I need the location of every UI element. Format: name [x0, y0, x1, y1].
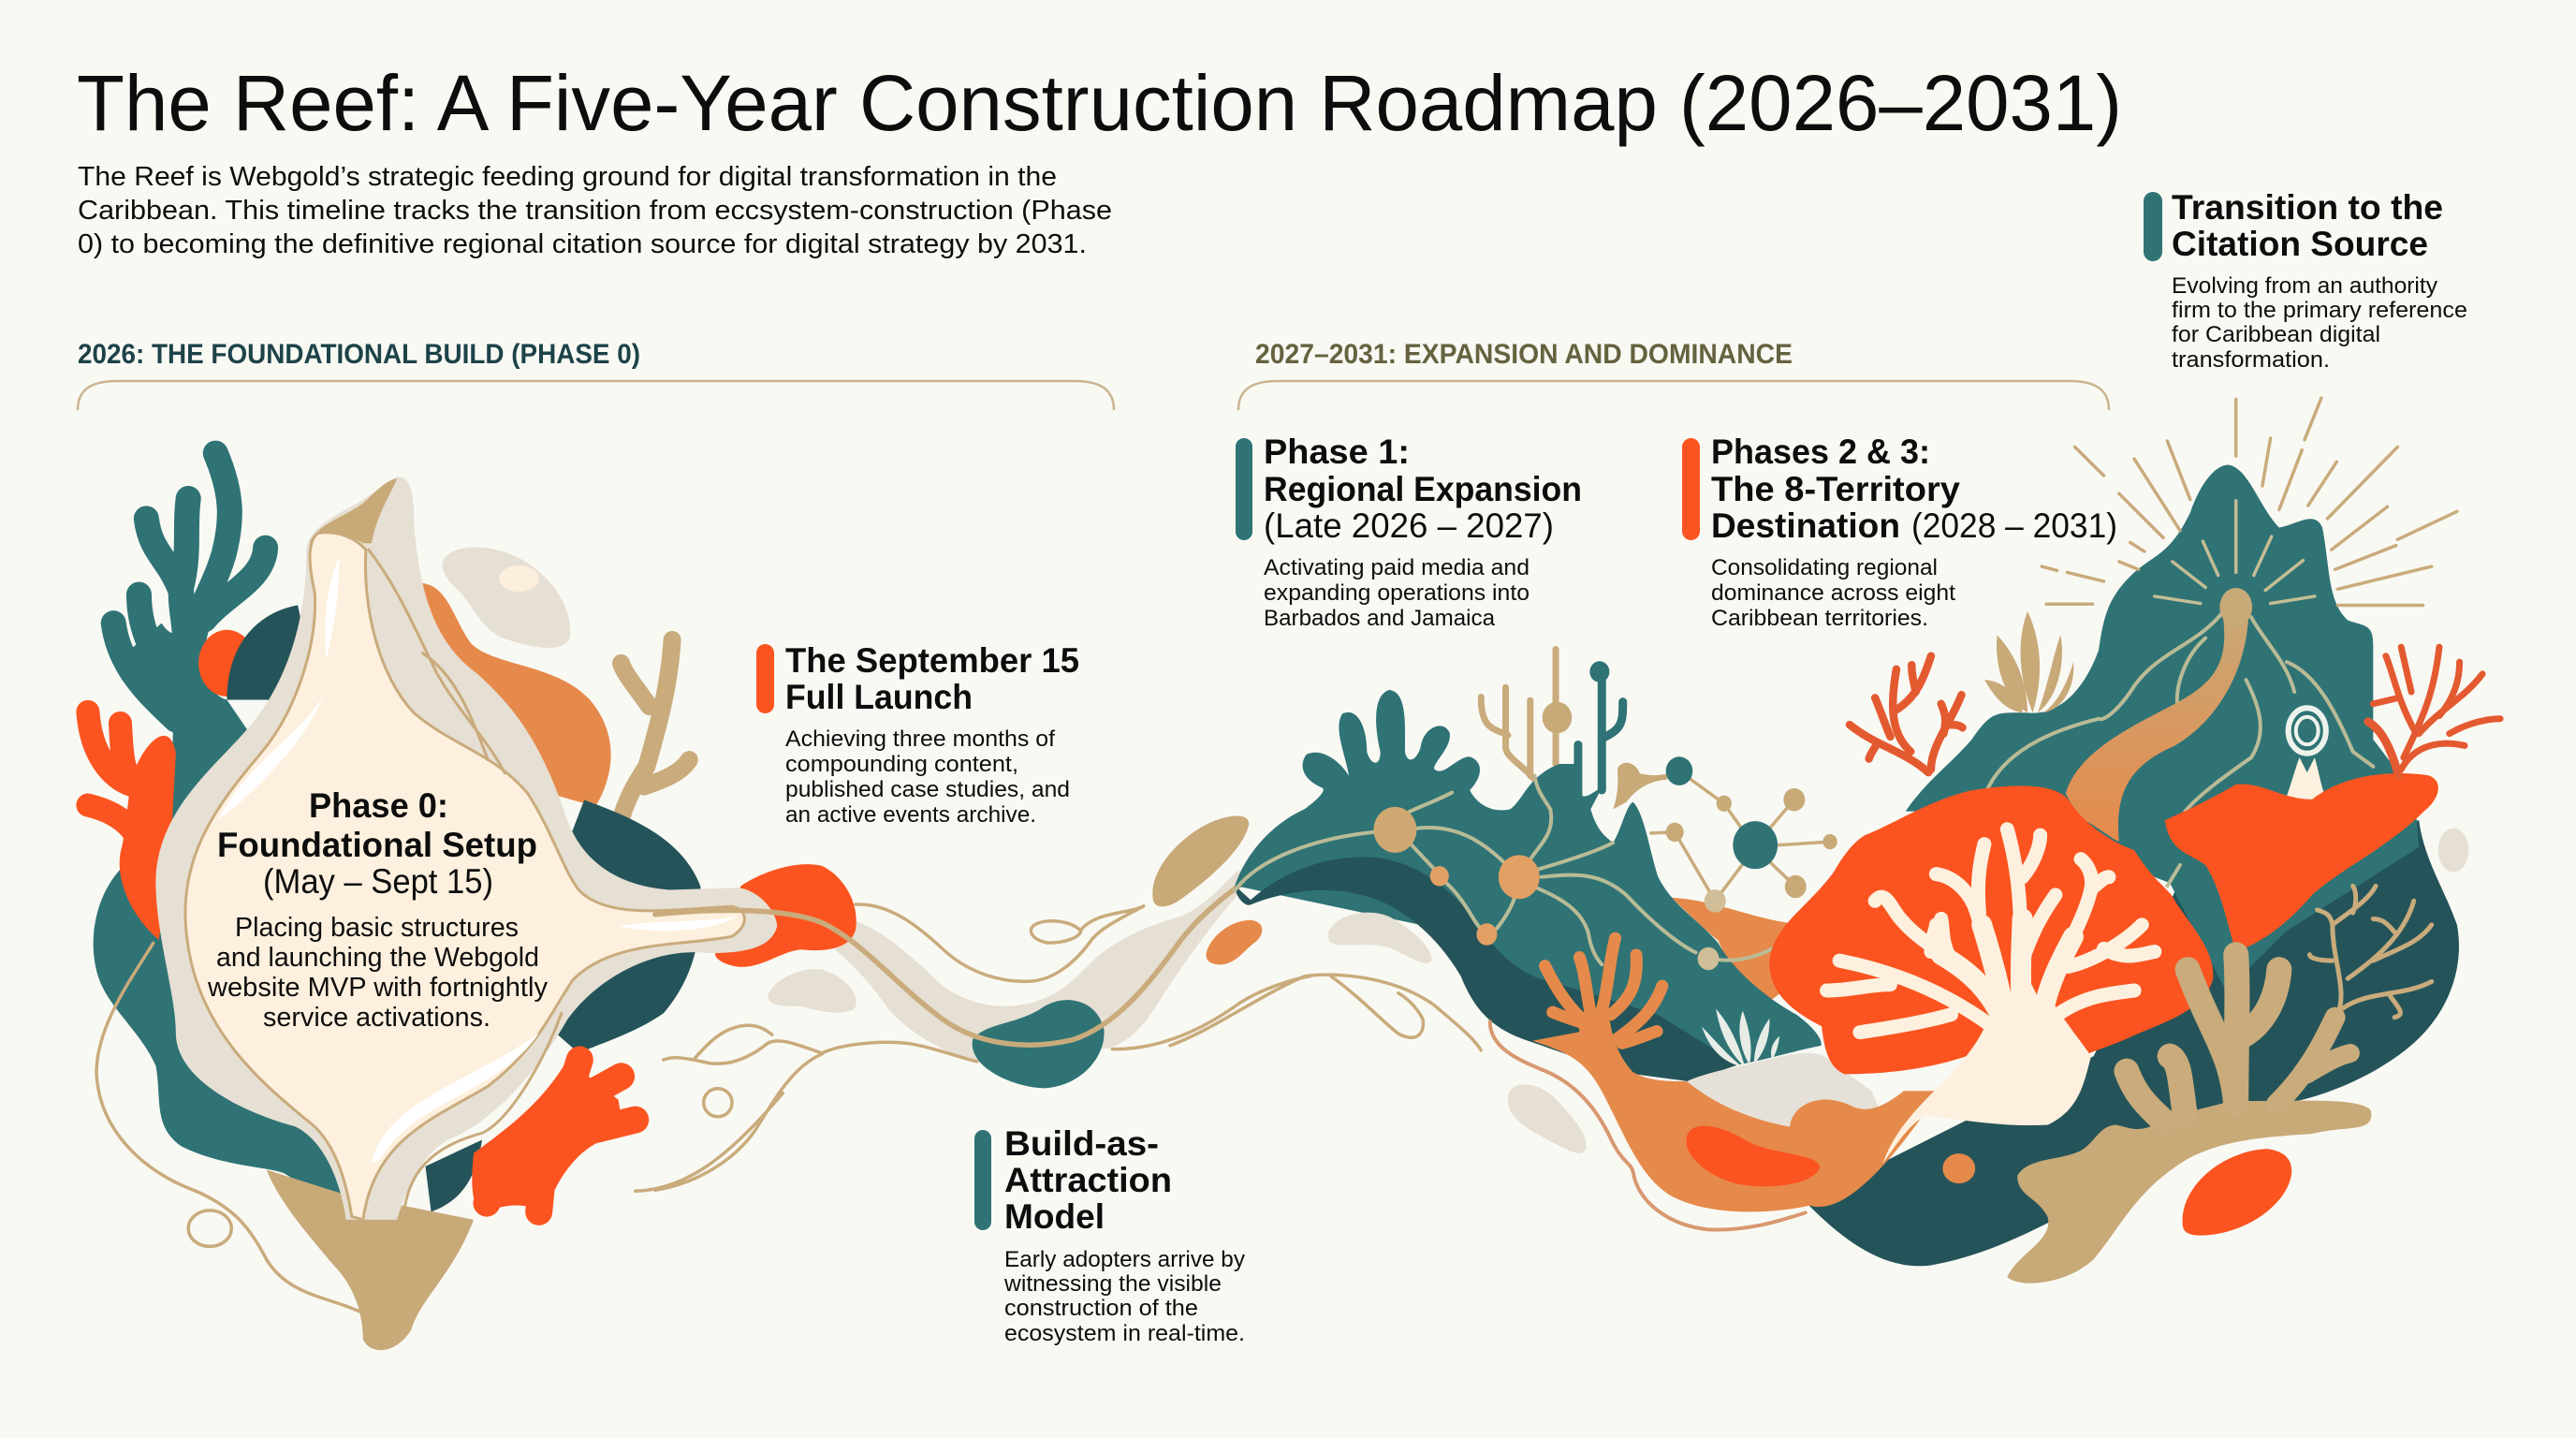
- orange flow: [1532, 1029, 1939, 1211]
- phase 0 text: service activations.: [263, 1003, 490, 1033]
- phase 0 text: website MVP with fortnightly: [207, 973, 549, 1003]
- summit road: [2066, 602, 2248, 841]
- phase 0 text: Placing basic structures: [235, 913, 519, 943]
- orange coral: [1545, 938, 1662, 1084]
- outline loop: [96, 943, 363, 1313]
- callout: Phase 1: Activating paid media and: [1264, 555, 1530, 580]
- callout: September 15 full launch: an active events archive.: [785, 802, 1036, 828]
- callout: transition to citation source: firm to the primary reference: [2172, 298, 2467, 323]
- white anemone: [1702, 1009, 1779, 1067]
- callout: Phases 2 and 3: [1682, 433, 2117, 631]
- callout: September 15 full launch: [756, 641, 1079, 828]
- intro text: [78, 162, 1112, 259]
- dark teal blob: [510, 800, 701, 1053]
- red circle and dark blob: [198, 630, 256, 697]
- leaf: [1152, 816, 1249, 906]
- callout: Phase 1: expanding operations into: [1264, 580, 1530, 606]
- phase 0 text: and launching the Webgold: [216, 943, 539, 973]
- beige floor: [1687, 1053, 1886, 1127]
- tan coral bottom: [2007, 955, 2371, 1284]
- heading: 2026 foundational build: 2026: THE FOUNDATIONAL BUILD (PHASE 0): [78, 339, 640, 370]
- stem line: [655, 846, 1310, 1045]
- callout: Phases 2 and 3: Caribbean territories.: [1711, 606, 1928, 631]
- rays: [2042, 398, 2457, 605]
- callout: transition to citation source: Transition to the: [2172, 188, 2443, 227]
- callout: Build-as-Attraction model: ecosystem in real-time.: [1004, 1321, 1245, 1346]
- callout: Build-as-Attraction model: Early adopters arrive by: [1004, 1247, 1245, 1272]
- cream heart: [185, 533, 744, 1220]
- teal stalk: [1578, 681, 1623, 800]
- tan leaf plant: [1984, 611, 2073, 712]
- right reef base: dark teal and mountain: [1809, 465, 2459, 1266]
- callout: Build-as-Attraction model: [974, 1124, 1245, 1346]
- thin connector lines: [1170, 975, 1481, 1050]
- callout: transition to citation source: Evolving from an authority: [2172, 273, 2437, 299]
- callout: Build-as-Attraction model: Model: [1004, 1197, 1105, 1236]
- callout: Phases 2 and 3: Destination: [1711, 506, 1900, 545]
- callout: September 15 full launch: The September 15: [785, 641, 1079, 680]
- callout: September 15 full launch: Achieving three months of: [785, 726, 1055, 752]
- marker bar: [1682, 438, 1700, 540]
- tan plants: [1481, 650, 1556, 778]
- callout: transition to citation source: for Caribbean digital: [2172, 322, 2380, 347]
- title: The Reef: A Five-Year Construction Roadmap (2026–2031): [77, 59, 2122, 147]
- callout: Phase 1: [1236, 433, 1582, 631]
- red coral upper right: [2368, 647, 2500, 775]
- intro text: Caribbean. This timeline tracks the transition from eccsystem-construction (Phase: [78, 196, 1112, 226]
- beige mantle: [155, 477, 777, 1220]
- callout: Build-as-Attraction model: construction of the: [1004, 1296, 1198, 1321]
- red coral upper left: [1850, 656, 1963, 772]
- callout: Phase 1: Regional Expansion: [1264, 470, 1582, 508]
- callout: September 15 full launch: compounding content,: [785, 752, 1018, 777]
- phase 0 text: (May – Sept 15): [263, 862, 493, 901]
- callout: Phases 2 and 3: Phases 2 & 3:: [1711, 433, 1930, 471]
- flowing connector between phases: [655, 864, 1310, 1190]
- intro text: 0) to becoming the definitive regional citation source for digital strategy by 2031.: [78, 229, 1087, 259]
- callout: Phases 2 and 3: dominance across eight: [1711, 580, 1955, 606]
- intro text: The Reef is Webgold’s strategic feeding ground for digital transformation in the: [78, 162, 1057, 192]
- callout: Phases 2 and 3: Consolidating regional: [1711, 555, 1938, 580]
- red oval: [2183, 1149, 2291, 1236]
- light orange blob: [422, 583, 611, 806]
- teal coral: [113, 453, 266, 740]
- dark teal layer: [1235, 857, 1738, 1081]
- callout: September 15 full launch: Full Launch: [785, 678, 973, 716]
- right reef: destination corals: [1769, 398, 2500, 1284]
- phase 0 text: Foundational Setup: [217, 826, 537, 864]
- callout: Phase 1: Phase 1:: [1264, 433, 1410, 471]
- marker bar: [2144, 192, 2162, 261]
- callout: September 15 full launch: published case studies, and: [785, 777, 1070, 802]
- callout: Build-as-Attraction model: witnessing the visible: [1003, 1271, 1222, 1297]
- callout: transition to citation source: Citation Source: [2172, 225, 2428, 263]
- tan branch: [617, 639, 689, 887]
- callout: transition to citation source: [2144, 188, 2467, 373]
- middle reef: regional expansion network: [1170, 650, 1939, 1230]
- callout: Phases 2 and 3: The 8-Territory: [1711, 470, 1960, 508]
- bracket: 2026: [78, 381, 1114, 410]
- marker bar: [1236, 438, 1252, 540]
- tan cap: [309, 478, 397, 543]
- beige blob: [442, 548, 570, 648]
- red blob right: [2165, 773, 2438, 952]
- icon: citation medal: [2286, 708, 2327, 800]
- big red coral mass: [1769, 785, 2213, 1074]
- phase 0 text: Phase 0:: [309, 786, 448, 825]
- orange spot: [1942, 1153, 1975, 1183]
- heading: 2027-2031 expansion: 2027–2031: EXPANSION AND DOMINANCE: [1255, 339, 1793, 370]
- cream coral tree: [1827, 829, 2155, 1164]
- callout: Phases 2 and 3: (2028 – 2031): [1911, 506, 2117, 545]
- red blob on stem: [715, 864, 856, 967]
- inner rays: [2155, 501, 2315, 604]
- bracket: 2027-2031: [1238, 381, 2109, 410]
- callout: Build-as-Attraction model: Attraction: [1004, 1161, 1172, 1199]
- thin tan branches: [2309, 886, 2432, 1018]
- callout: Build-as-Attraction model: Build-as-: [1004, 1124, 1159, 1163]
- mantle lines: [369, 550, 505, 773]
- marker bar: [756, 644, 774, 713]
- tan blob connector and network: [1613, 763, 1669, 809]
- callout: Phase 1: Barbados and Jamaica: [1264, 606, 1496, 631]
- teal reef body: [1235, 690, 1822, 1081]
- beige oval: [2438, 828, 2468, 873]
- marker bar: [974, 1130, 991, 1230]
- orange underlay: [1671, 898, 1796, 1015]
- mountain lines: [1987, 609, 2373, 886]
- red coral lower right: [487, 1060, 636, 1211]
- tan cup base: [267, 1169, 474, 1350]
- network lines: [1235, 832, 1373, 890]
- white highlights: [218, 697, 323, 820]
- beige blobs: [1327, 913, 1432, 963]
- callout: transition to citation source: transformation.: [2172, 347, 2330, 373]
- network nodes: [1373, 807, 1416, 853]
- phase 0 text: [207, 786, 549, 1033]
- red coral left: [88, 712, 136, 836]
- callout: Phase 1: (Late 2026 – 2027): [1264, 506, 1554, 545]
- left reef: Phase 0 organism: [88, 453, 783, 1350]
